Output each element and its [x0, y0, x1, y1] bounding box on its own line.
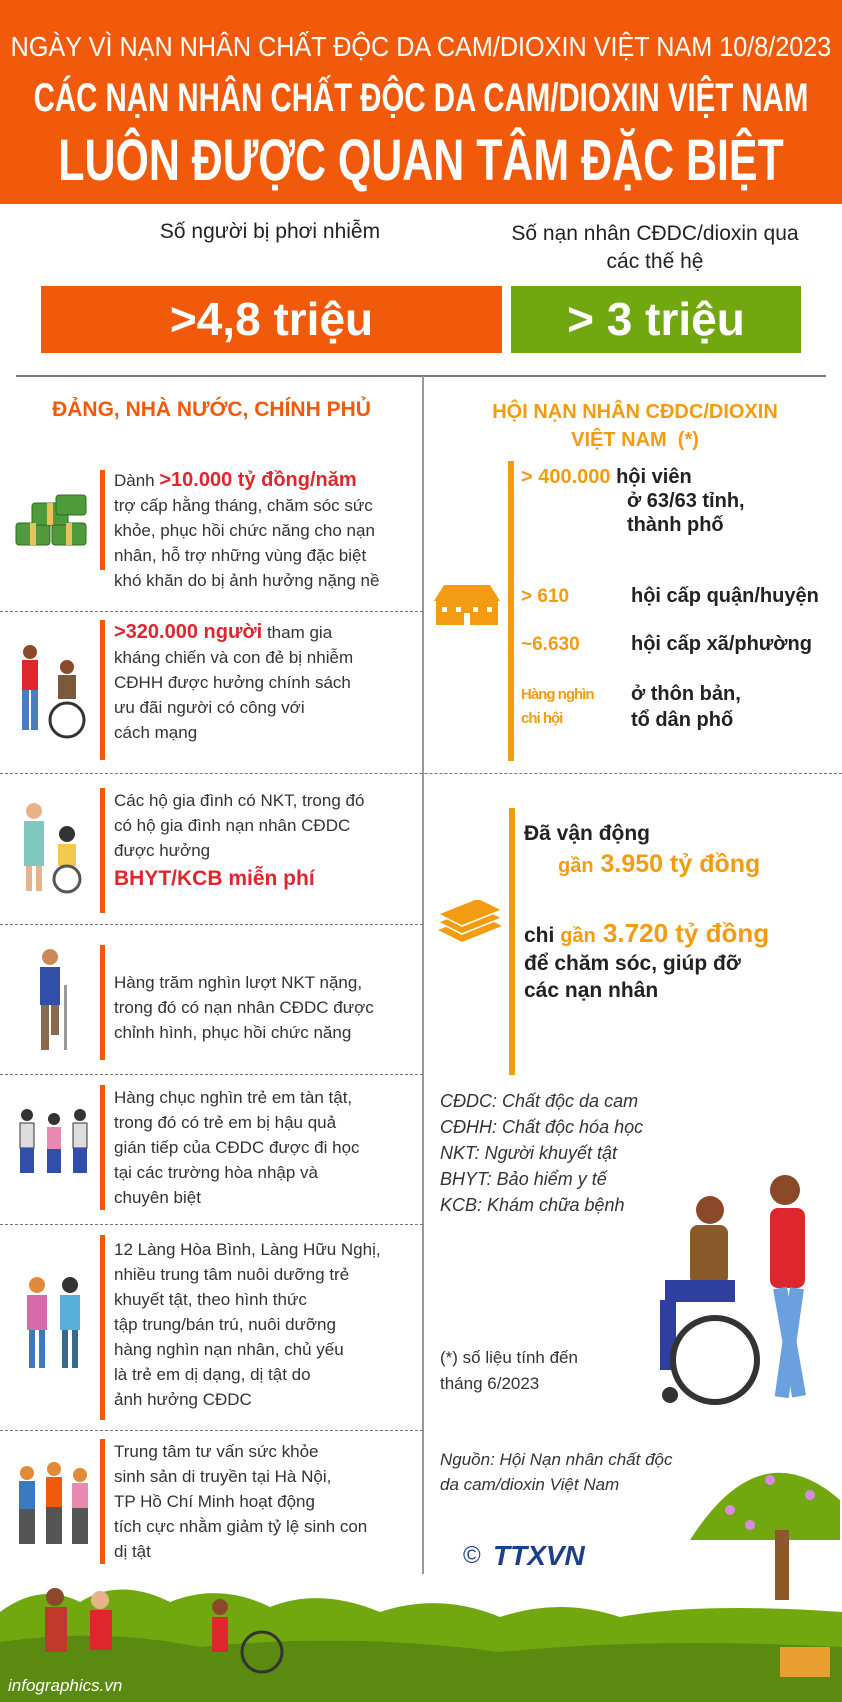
- icon: children group: [20, 1109, 88, 1173]
- stat: branches: ở thôn bản,: [631, 683, 741, 705]
- text: >320.000 người tham gia: [114, 621, 332, 643]
- text: Các hộ gia đình có NKT, trong đó: [114, 791, 364, 810]
- text: nhiều trung tâm nuôi dưỡng trẻ: [114, 1265, 349, 1284]
- stat box orange: >4,8 triệu: [170, 293, 373, 345]
- panel: association network: [434, 461, 819, 761]
- icon: family: [19, 1462, 88, 1544]
- row 4: rehabilitation: [40, 945, 374, 1060]
- header line 2: CÁC NẠN NHÂN CHẤT ĐỘC DA CAM/DIOXIN VIỆT NAM: [34, 76, 808, 120]
- footnote: [440, 1348, 578, 1393]
- ground scene: [0, 1588, 842, 1702]
- stat: communes: [521, 633, 812, 655]
- footnote: tháng 6/2023: [440, 1374, 539, 1393]
- footer site: infographics.vn: [8, 1676, 122, 1695]
- text: TP Hồ Chí Minh hoạt động: [114, 1492, 315, 1511]
- header line 1: NGÀY VÌ NẠN NHÂN CHẤT ĐỘC DA CAM/DIOXIN VIỆT NAM 10/8/2023: [11, 31, 831, 62]
- label: exposed: Số người bị phơi nhiễm: [160, 220, 380, 243]
- icon: house: [434, 585, 500, 625]
- icon: man with crutch: [40, 949, 67, 1050]
- text: hàng nghìn nạn nhân, chủ yếu: [114, 1340, 344, 1359]
- stat: districts: > 610: [521, 586, 569, 607]
- row 6: peace villages: [27, 1235, 381, 1420]
- text: trong đó có nạn nhân CĐDC được: [114, 998, 374, 1017]
- heading right: VIỆT NAM (*): [571, 429, 699, 451]
- stat: branches: tổ dân phố: [631, 709, 733, 731]
- stat: branches: chi hội: [521, 710, 562, 727]
- icon: money: [438, 900, 502, 942]
- stat: communes: ~6.630: [521, 634, 580, 655]
- panel: funds: [438, 808, 769, 1075]
- text: gián tiếp của CĐDC được đi học: [114, 1138, 360, 1157]
- text: BHYT/KCB miễn phí: [114, 867, 315, 890]
- text: khó khăn do bị ảnh hưởng nặng nề: [114, 571, 379, 590]
- source: da cam/dioxin Việt Nam: [440, 1475, 619, 1494]
- text: sinh sản di truyền tại Hà Nội,: [114, 1467, 331, 1486]
- stat: communes: hội cấp xã/phường: [631, 633, 812, 655]
- logo TTXVN: TTXVN: [493, 1540, 585, 1571]
- row 2: veterans: [22, 620, 353, 760]
- text: là trẻ em dị dạng, dị tật do: [114, 1365, 311, 1384]
- stat: members: thành phố: [627, 514, 724, 536]
- abbreviations legend: KCB: Khám chữa bệnh: [440, 1195, 625, 1215]
- footnote: (*) số liệu tính đến: [440, 1348, 578, 1367]
- text: chuyên biệt: [114, 1188, 201, 1207]
- stat: districts: [521, 585, 819, 607]
- text: Dành >10.000 tỷ đồng/năm: [114, 469, 357, 491]
- row 5: education: [20, 1085, 360, 1210]
- text: Hàng trăm nghìn lượt NKT nặng,: [114, 973, 362, 992]
- row 3: health insurance: [24, 788, 364, 913]
- text: dị tật: [114, 1542, 151, 1561]
- text: có hộ gia đình nạn nhân CĐDC: [114, 816, 350, 835]
- text: 12 Làng Hòa Bình, Làng Hữu Nghị,: [114, 1240, 381, 1259]
- icon: wheelchair helper: [22, 645, 86, 738]
- text: spent: để chăm sóc, giúp đỡ: [524, 952, 741, 975]
- abbreviations legend: [440, 1091, 643, 1215]
- text: ưu đãi người có công với: [114, 698, 305, 717]
- stat: branches: Hàng nghìn: [521, 686, 594, 703]
- logo TTXVN: ©: [463, 1542, 481, 1569]
- text: tập trung/bán trú, nuôi dưỡng: [114, 1315, 336, 1334]
- text: [114, 791, 364, 890]
- text: được hưởng: [114, 841, 210, 860]
- illustration: wheelchair: [660, 1175, 806, 1405]
- text: [114, 1088, 360, 1207]
- text: spent: chi gần 3.720 tỷ đồng: [524, 918, 769, 948]
- text: tại các trường hòa nhập và: [114, 1163, 318, 1182]
- text: cách mạng: [114, 723, 197, 742]
- heading right: [492, 400, 778, 451]
- text: [114, 1240, 381, 1409]
- text: [114, 1442, 367, 1561]
- text: CĐHH được hưởng chính sách: [114, 673, 351, 692]
- text: tích cực nhằm giảm tỷ lệ sinh con: [114, 1517, 367, 1536]
- stat: branches: [521, 683, 741, 731]
- text: trong đó có trẻ em bị hậu quả: [114, 1113, 336, 1132]
- heading left: ĐẢNG, NHÀ NƯỚC, CHÍNH PHỦ: [52, 398, 371, 421]
- icon: two people: [27, 1277, 80, 1368]
- abbreviations legend: CĐDC: Chất độc da cam: [440, 1091, 638, 1111]
- header banner: [0, 0, 842, 204]
- tree: [690, 1472, 840, 1600]
- heading right: HỘI NẠN NHÂN CĐDC/DIOXIN: [492, 401, 778, 423]
- text: kháng chiến và con đẻ bị nhiễm: [114, 648, 353, 667]
- abbreviations legend: CĐHH: Chất độc hóa học: [440, 1117, 643, 1137]
- stat: raised amount: gần 3.950 tỷ đồng: [558, 850, 760, 878]
- text: ảnh hưởng CĐDC: [114, 1390, 252, 1409]
- row 7: counseling: [19, 1439, 367, 1564]
- text: spent: các nạn nhân: [524, 979, 658, 1002]
- stat box green: > 3 triệu: [567, 293, 745, 345]
- text: khỏe, phục hồi chức năng cho nạn: [114, 521, 375, 540]
- text: [114, 621, 353, 742]
- text: [114, 973, 374, 1042]
- abbreviations legend: NKT: Người khuyết tật: [440, 1143, 617, 1163]
- label: victims: Số nạn nhân CĐDC/dioxin qua các thế hệ: [511, 222, 799, 273]
- row 1: budget: [16, 469, 379, 590]
- text: khuyết tật, theo hình thức: [114, 1290, 307, 1309]
- text: chỉnh hình, phục hồi chức năng: [114, 1023, 351, 1042]
- text: Trung tâm tư vấn sức khỏe: [114, 1442, 318, 1461]
- text: spent: [524, 918, 769, 1002]
- stat box orange: [41, 286, 502, 353]
- text: raised: Đã vận động: [524, 822, 650, 845]
- text: trợ cấp hằng tháng, chăm sóc sức: [114, 496, 373, 515]
- icon: nurse and child: [24, 803, 82, 894]
- stat box green: [511, 286, 801, 353]
- source: Nguồn: Hội Nạn nhân chất độc: [440, 1450, 672, 1469]
- stat: members: > 400.000 hội viên: [521, 466, 692, 488]
- stat: members: ở 63/63 tỉnh,: [627, 490, 745, 512]
- stat: districts: hội cấp quận/huyện: [631, 585, 819, 607]
- text: [114, 469, 379, 590]
- stat: members: [521, 466, 745, 536]
- icon: money stacks: [16, 494, 86, 546]
- source: [440, 1450, 672, 1494]
- text: Hàng chục nghìn trẻ em tàn tật,: [114, 1088, 352, 1107]
- header title: LUÔN ĐƯỢC QUAN TÂM ĐẶC BIỆT: [58, 128, 784, 193]
- text: nhân, hỗ trợ những vùng đặc biệt: [114, 546, 366, 565]
- abbreviations legend: BHYT: Bảo hiểm y tế: [440, 1169, 607, 1189]
